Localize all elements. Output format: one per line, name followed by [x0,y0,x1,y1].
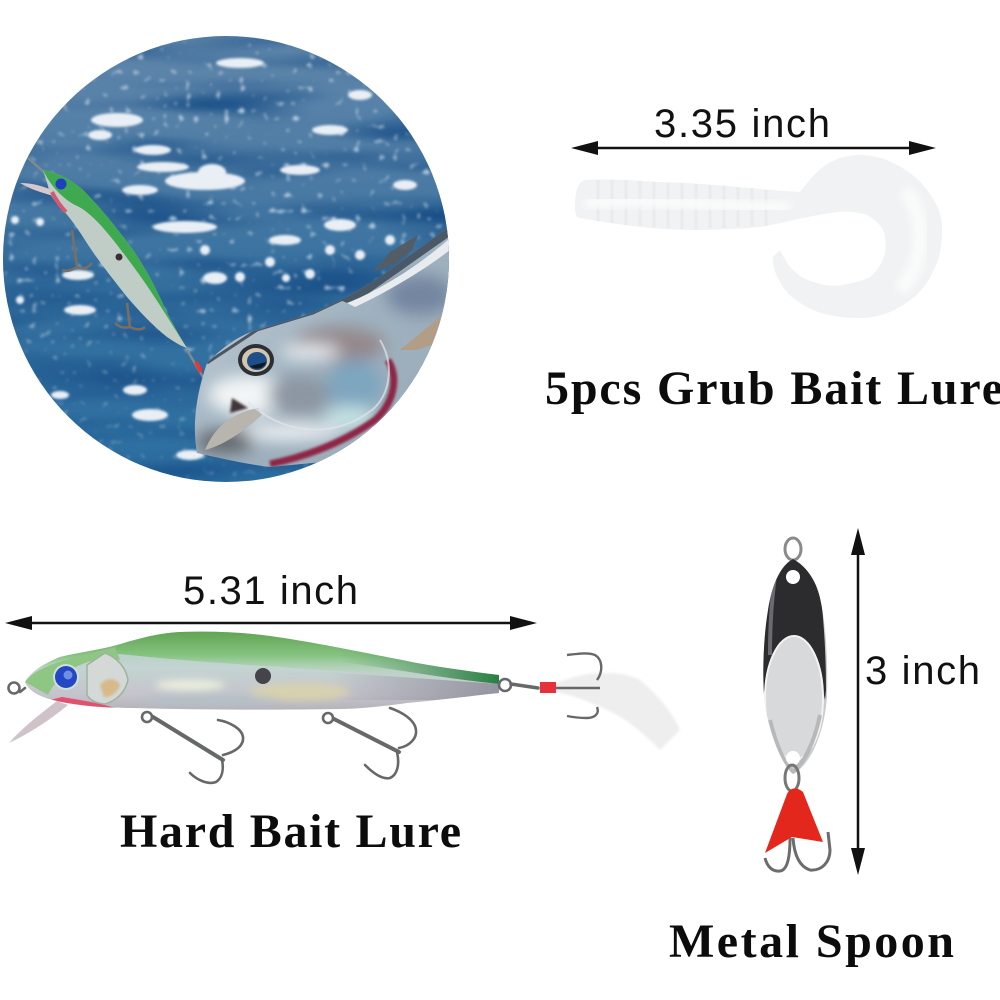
tail band [540,682,556,693]
jaw [205,408,262,450]
lip [9,701,68,743]
tuna in photo [194,228,449,467]
gill [87,653,128,704]
label: metal spoon: Metal Spoon [669,915,954,968]
side dot [255,668,271,684]
tuna eye [238,344,274,376]
grub bait lure [575,155,942,318]
photo: lure catching fish in the sea [0,30,460,490]
back stripe [340,226,450,305]
water sparkles [11,58,417,460]
dimension arrow: 3.35 inch [571,102,936,155]
small lure in photo [20,158,203,377]
metal spoon [763,536,832,873]
tuna fin [373,235,418,272]
lure body [25,632,499,710]
dimension arrow: 3 inch [851,528,980,875]
feather [556,673,680,750]
hard bait lure [8,625,680,783]
dimension arrow: 3.35 inch: 3.35 inch [654,102,830,146]
label: grub bait: 5pcs Grub Bait Lure [545,362,1000,415]
hooks [8,679,538,783]
label: hard bait: Hard Bait Lure [120,805,461,858]
dimension arrow: 5.31 inch [5,569,537,630]
dimension arrow: 3 inch: 3 inch [865,649,980,693]
dimension arrow: 5.31 inch: 5.31 inch [183,569,358,613]
eye [53,664,79,690]
gill and red throat [270,360,394,464]
